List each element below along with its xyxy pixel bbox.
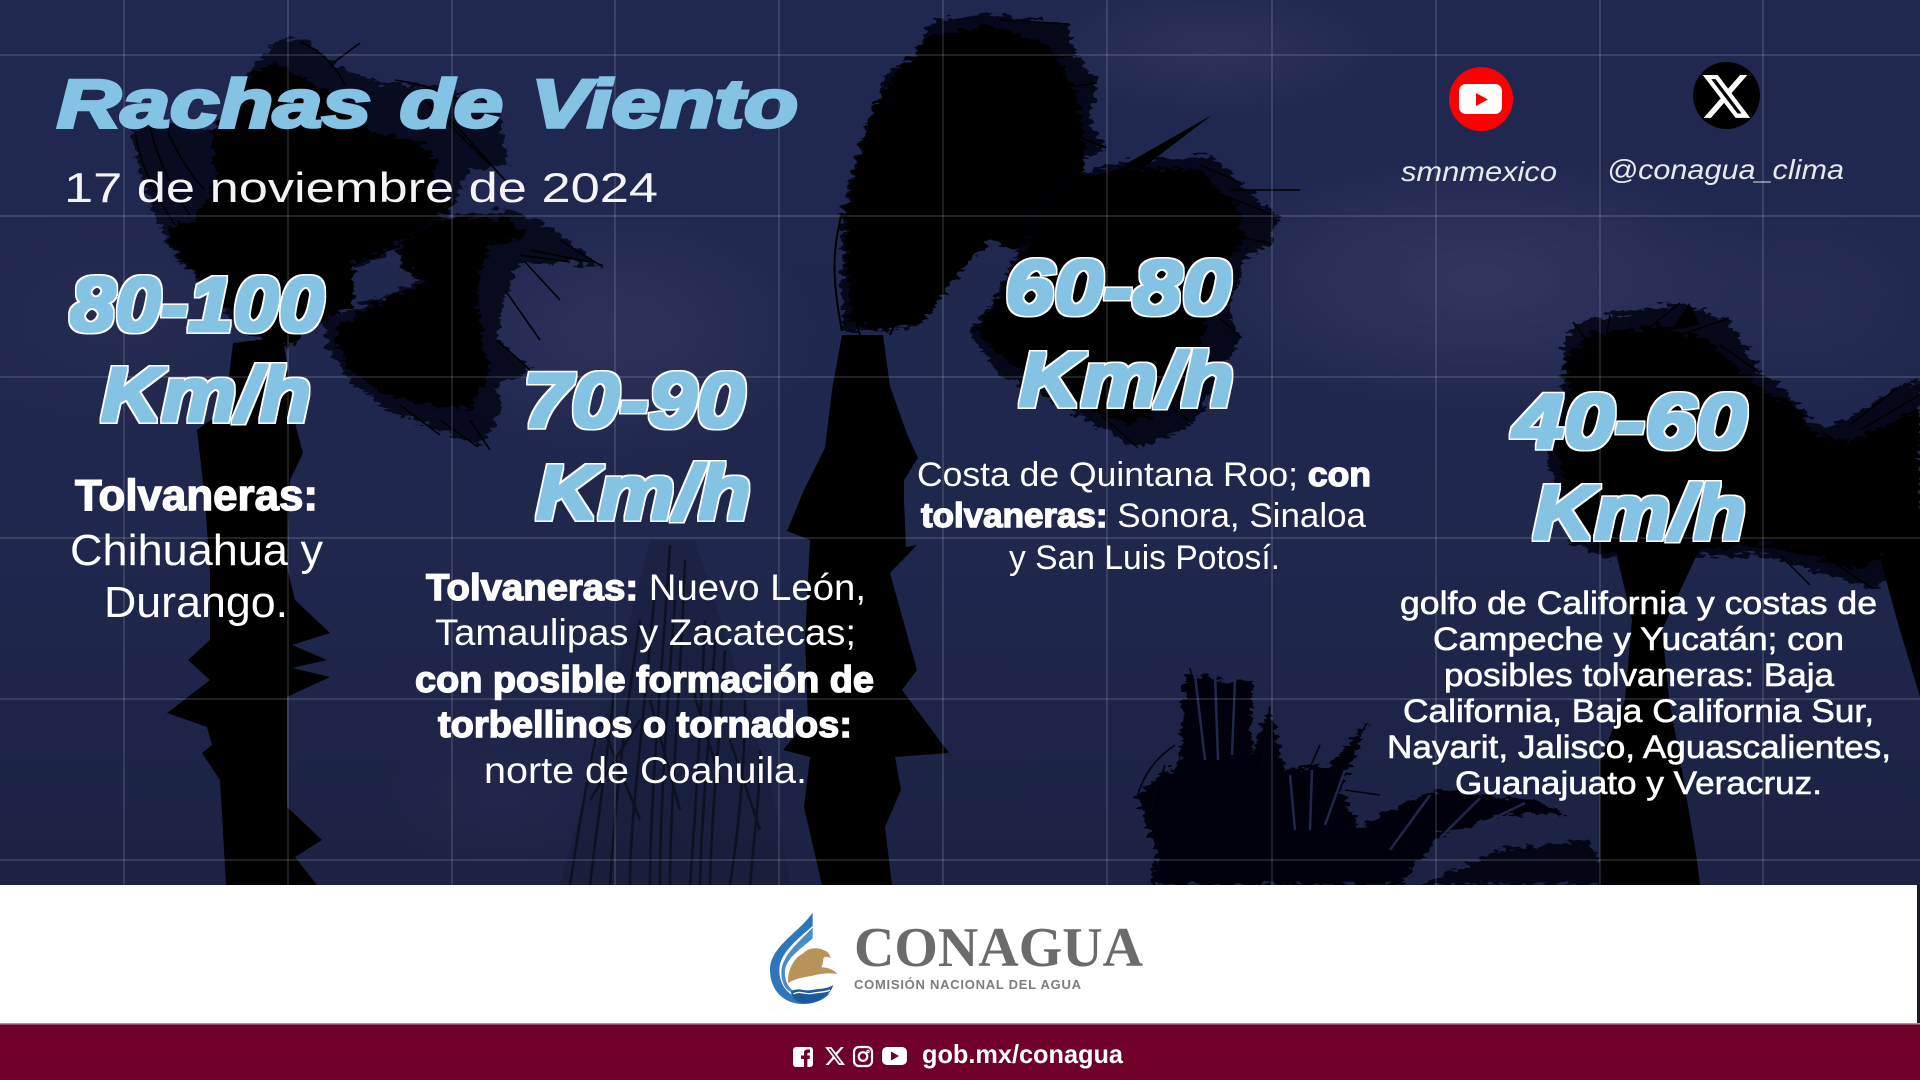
palm silhouette: centre	[783, 14, 1300, 885]
palm silhouette: left	[130, 40, 603, 885]
tagline: COMISIÓN NACIONAL DEL AGUA	[854, 977, 1082, 992]
column: 70-90 km/h	[415, 358, 874, 791]
icon: youtube	[882, 1047, 907, 1065]
speed range 40-60: 40-60	[1511, 379, 1747, 465]
icon: X	[1693, 62, 1760, 129]
speed range 70-90: 70-90	[523, 358, 745, 444]
handle: smnmexico: smnmexico	[1401, 156, 1557, 187]
affected states: torbellinos o tornados:	[438, 704, 852, 745]
low palm fronds	[1137, 668, 1610, 885]
handle: conagua_clima: @conagua_clima	[1607, 154, 1844, 185]
affected states: con posible formación de	[415, 659, 874, 700]
affected states: y San Luis Potosí.	[1009, 539, 1280, 577]
logo band	[0, 885, 1920, 1024]
affected states	[917, 456, 1371, 577]
site address: gob.mx/conagua	[922, 1039, 1124, 1069]
icon: instagram	[854, 1047, 872, 1066]
sparse bare tree	[560, 540, 790, 885]
column: 80-100 km/h	[70, 262, 335, 627]
title: Rachas de Viento	[57, 66, 798, 142]
icon: youtube	[1449, 67, 1513, 131]
affected states: Nayarit, Jalisco, Aguascalientes,	[1387, 729, 1891, 765]
social: X	[1607, 62, 1844, 185]
social: YouTube	[1401, 67, 1557, 187]
column: 40-60 km/h	[1387, 379, 1891, 801]
affected states: tolvaneras: Sonora, Sinaloa	[921, 497, 1366, 535]
footer bar	[0, 1023, 1920, 1080]
affected states: Costa de Quintana Roo; con	[917, 456, 1371, 494]
affected states: norte de Coahuila.	[484, 750, 807, 791]
affected states: Durango.	[104, 578, 288, 627]
affected states: California, Baja California Sur,	[1403, 693, 1874, 729]
affected states	[1387, 585, 1891, 801]
icon: facebook	[793, 1047, 813, 1067]
palm silhouette: right	[1547, 303, 1920, 885]
icon: X	[825, 1047, 845, 1065]
affected states	[415, 567, 874, 791]
unit km/h: Km/h	[1533, 470, 1746, 556]
affected states: Tamaulipas y Zacatecas;	[435, 612, 856, 653]
affected states: Campeche y Yucatán; con	[1433, 621, 1844, 657]
speed range 80-100: 80-100	[70, 262, 324, 348]
affected states: Chihuahua y	[70, 526, 323, 575]
column: 60-80 km/h	[917, 245, 1371, 577]
unit km/h: Km/h	[536, 450, 751, 536]
affected states: golfo de California y costas de	[1400, 585, 1877, 621]
icon: Conagua emblem	[770, 913, 837, 1004]
unit km/h: Km/h	[101, 352, 311, 438]
affected states: Guanajuato y Veracruz.	[1455, 765, 1822, 801]
wordmark: CONAGUA	[854, 917, 1144, 979]
date: 17 de noviembre de 2024	[64, 164, 658, 211]
affected states: posibles tolvaneras: Baja	[1444, 657, 1834, 693]
affected states: Tolvaneras:	[75, 471, 318, 520]
unit km/h: Km/h	[1019, 337, 1234, 423]
speed range 60-80: 60-80	[1005, 245, 1231, 331]
affected states: Tolvaneras: Nuevo León,	[426, 567, 866, 608]
